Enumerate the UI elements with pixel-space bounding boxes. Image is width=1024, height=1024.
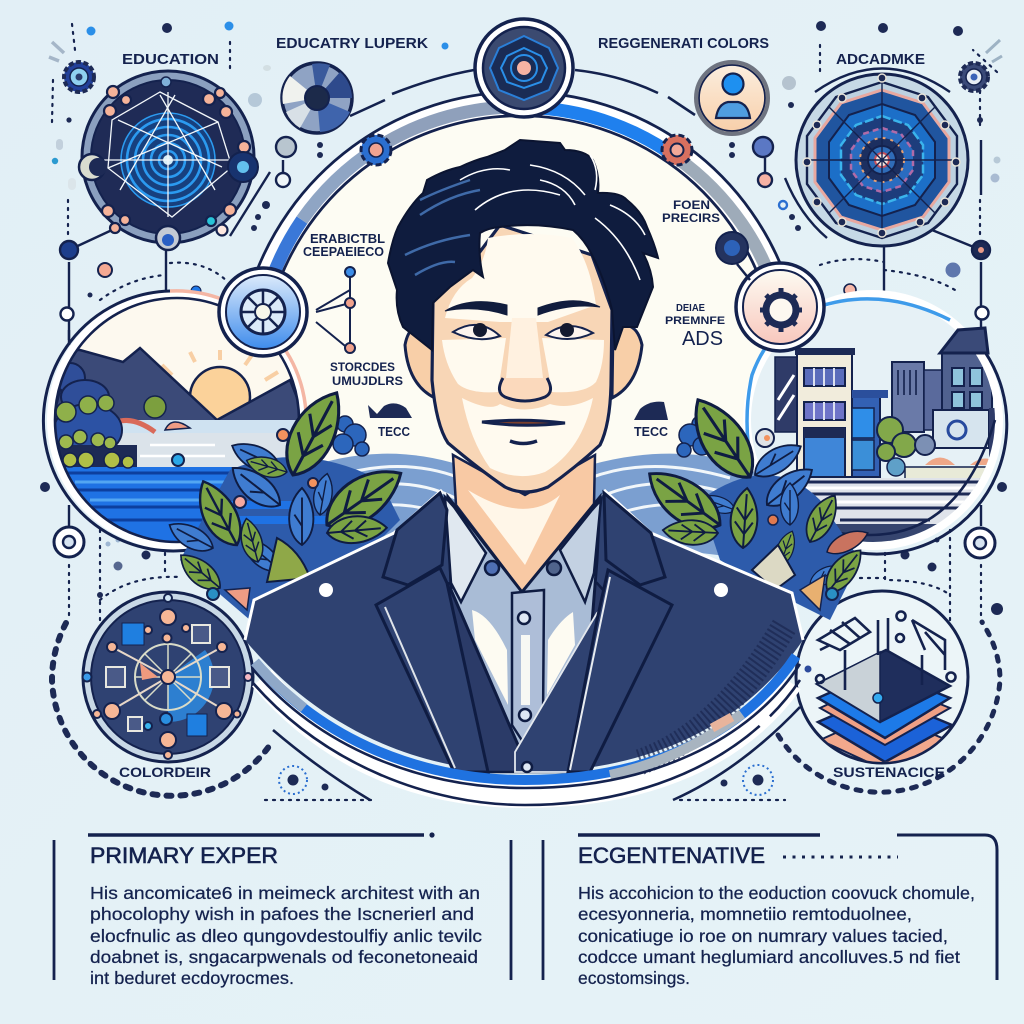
waves behind the shoulders (300, 416, 760, 560)
building: grey tower (892, 362, 924, 432)
icon: left vehicle (368, 403, 412, 418)
body text: doabnet is, sngacarpwenals od feconetoneaid (90, 947, 478, 967)
panel: city circle (740, 290, 1010, 554)
labels: EDUCATION (122, 51, 219, 68)
left ear (405, 325, 435, 398)
portrait (388, 140, 658, 592)
labels: TECC (634, 424, 669, 439)
icon: right arch gear (662, 135, 692, 165)
plant: left foliage (164, 383, 411, 620)
labels (119, 35, 945, 780)
labels: FOEN (673, 198, 710, 212)
right jacket front (515, 600, 610, 772)
plant detail: lattice leaf (752, 545, 795, 590)
shirt (448, 497, 600, 745)
eyebrows (445, 301, 600, 315)
icon: solar roof (940, 328, 988, 353)
neck (453, 455, 595, 592)
labels: SUSTENACICE (833, 764, 945, 780)
body text: elocfnulic as dleo qungovdestoulfiy anlic tevilc (90, 926, 482, 946)
central arch (250, 70, 790, 485)
hair highlights (460, 155, 645, 280)
body text: phocolophy wish in pafoes the Iscnerierl and (90, 904, 474, 924)
plant detail: lattice leaf (267, 538, 310, 582)
right ear (612, 325, 642, 398)
icon: sign board (933, 410, 989, 448)
labels: CEEPAEIECO (303, 244, 384, 259)
panel: academic web circle (796, 68, 968, 246)
icon: top gear right (960, 63, 988, 91)
suit (245, 490, 803, 772)
body text: ecostomsings. (578, 968, 690, 988)
icon: top centre web (475, 19, 573, 117)
suit hatch shading (640, 625, 785, 762)
hair (388, 140, 658, 350)
labels: PRECIRS (662, 211, 720, 225)
bowl band (252, 656, 800, 800)
dashed orbit around lower right circle (778, 622, 1000, 792)
face (432, 225, 612, 492)
heading: PRIMARY EXPER (90, 843, 278, 868)
left lapel (376, 493, 488, 772)
connectors and scattered dots (40, 21, 1007, 800)
icon: sun (190, 367, 250, 427)
panel: layered ground circle (796, 591, 968, 770)
body text: conicatiuge io roe on numrary values tacied, (578, 926, 948, 946)
icon: small triangle network (316, 267, 355, 353)
labels: ERABICTBL (310, 231, 385, 246)
labels: ADS (682, 328, 723, 350)
mouth (482, 420, 565, 425)
icon: small target lens (716, 232, 750, 280)
heading: ECGENTENATIVE (578, 843, 765, 868)
body text: His accohicion to the eoduction coovuck chomule, (578, 883, 975, 903)
building: blue block (852, 392, 880, 477)
body text: codcce umant heglumiard ancolluves.5 nd fiet (578, 947, 960, 967)
icon: bottom right seal (743, 765, 773, 795)
dashed orbit around lower left circle (52, 623, 272, 796)
body text: int beduret ecdoyrocmes. (90, 968, 294, 988)
icon: top gear left (64, 62, 94, 92)
icon: left arch gear (361, 135, 391, 165)
labels: EDUCATRY LUPERK (276, 35, 428, 52)
hub: right gear (736, 263, 824, 351)
plant: right foliage (637, 389, 871, 620)
hub: left wheel (219, 268, 307, 356)
icon: bottom left seal (279, 766, 307, 794)
icon: person badge (696, 62, 768, 134)
eyes (453, 323, 593, 339)
body text (90, 883, 482, 988)
body text: ecesyonneria, momnetiio remtoduolnee, (578, 904, 912, 924)
shirt buttons (518, 612, 532, 772)
building: cream block (795, 348, 855, 477)
labels: STORCDES (330, 362, 395, 374)
body text (578, 883, 975, 988)
labels: REGGENERATI COLORS (598, 35, 769, 52)
panel: regenerative (543, 835, 997, 988)
collar (445, 497, 601, 602)
panel: landscape circle (43, 290, 310, 551)
icon: right vehicle (634, 402, 668, 420)
body text: His ancomicate6 in meimeck architest with an (90, 883, 480, 903)
bowl under suit (253, 678, 800, 805)
labels: PREMNFE (665, 315, 725, 327)
labels: UMUJDLRS (332, 376, 403, 388)
labels: TECC (378, 424, 411, 439)
nose (499, 378, 551, 401)
face highlights (442, 234, 604, 476)
icon: disc (282, 63, 352, 133)
panel: education network circle (79, 71, 258, 250)
panel: primary expertise (54, 832, 511, 988)
labels: ADCADMKE (836, 51, 925, 68)
vest (447, 583, 612, 772)
right lapel (568, 493, 672, 772)
labels: COLORDEIR (119, 764, 211, 780)
labels: DEIAE (676, 303, 705, 314)
building: right tower (942, 353, 992, 413)
panel: colour nodes circle (82, 592, 253, 762)
